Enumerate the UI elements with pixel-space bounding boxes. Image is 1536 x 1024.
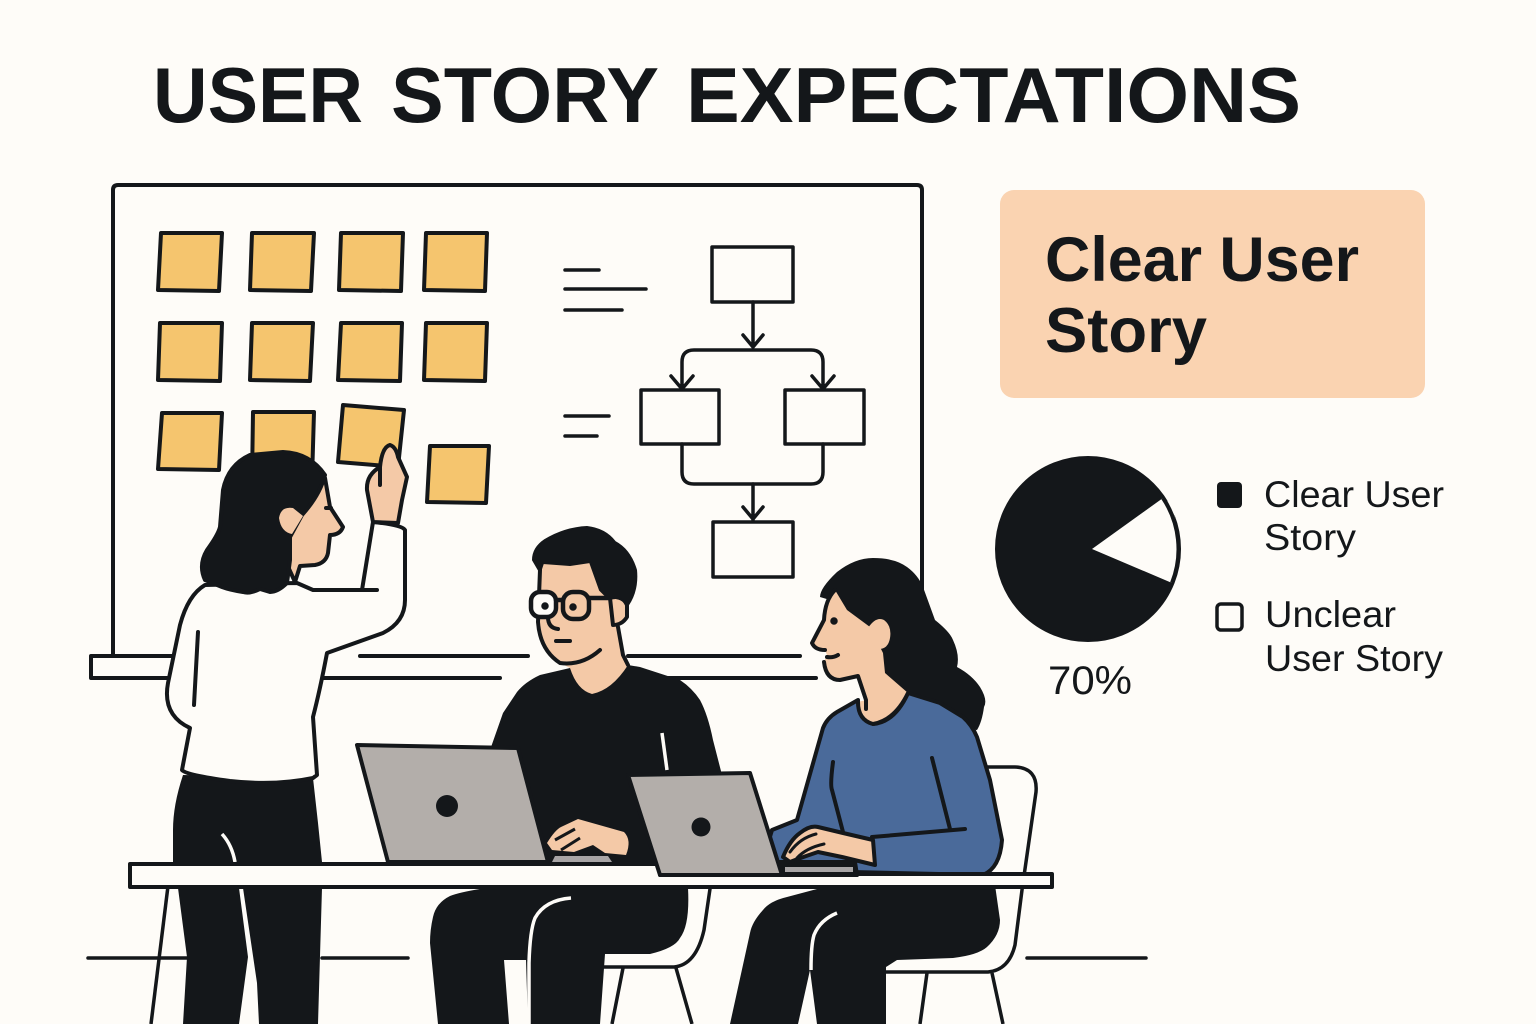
title: EXPECTATIONS — [686, 51, 1301, 139]
pie chart — [996, 457, 1180, 703]
sweater — [760, 693, 1002, 875]
hair — [533, 527, 636, 605]
glasses — [531, 592, 556, 617]
legs — [430, 888, 688, 1024]
person: standing woman — [167, 445, 407, 1024]
nose and mouth — [548, 617, 570, 641]
woman trouser highlight — [811, 913, 837, 970]
title — [153, 51, 1301, 139]
trousers — [173, 775, 322, 1024]
legend — [1217, 474, 1444, 679]
pie chart: 70% — [1048, 659, 1132, 703]
title: USER — [153, 51, 363, 139]
floor lines — [88, 956, 1146, 960]
sticky notes — [158, 233, 489, 503]
sweater — [167, 522, 405, 783]
whiteboard — [91, 185, 922, 678]
hair — [202, 452, 325, 593]
person: seated man — [430, 527, 722, 1024]
hand — [367, 445, 407, 523]
ear — [279, 508, 303, 534]
chair: middle — [600, 882, 711, 1024]
legend: User Story — [1265, 638, 1443, 679]
callout: clear user story: Story — [1045, 296, 1207, 366]
laptop: left — [357, 745, 612, 862]
table — [130, 864, 1052, 887]
face — [280, 478, 343, 582]
ear — [610, 597, 627, 625]
man clothing highlights — [662, 733, 667, 770]
text lines on whiteboard — [565, 270, 646, 436]
callout: clear user story — [1000, 190, 1425, 398]
face and neck — [538, 562, 628, 694]
hair — [820, 558, 985, 730]
face and neck — [812, 590, 908, 724]
ear — [868, 619, 890, 649]
title: STORY — [391, 51, 659, 139]
hand: man — [547, 819, 629, 855]
table leg: left — [151, 886, 168, 1024]
torso — [490, 665, 722, 864]
legend: Unclear — [1265, 594, 1396, 635]
chair: right — [880, 767, 1036, 1024]
laptop: right — [628, 773, 857, 875]
legend: Story — [1264, 517, 1357, 558]
legs — [730, 885, 1000, 1024]
hand: woman — [783, 827, 875, 865]
flowchart — [641, 247, 864, 577]
person: seated woman — [730, 558, 1002, 1024]
trouser highlights — [222, 834, 235, 862]
legend: Clear User — [1264, 474, 1444, 515]
callout: clear user story: Clear User — [1045, 225, 1359, 295]
